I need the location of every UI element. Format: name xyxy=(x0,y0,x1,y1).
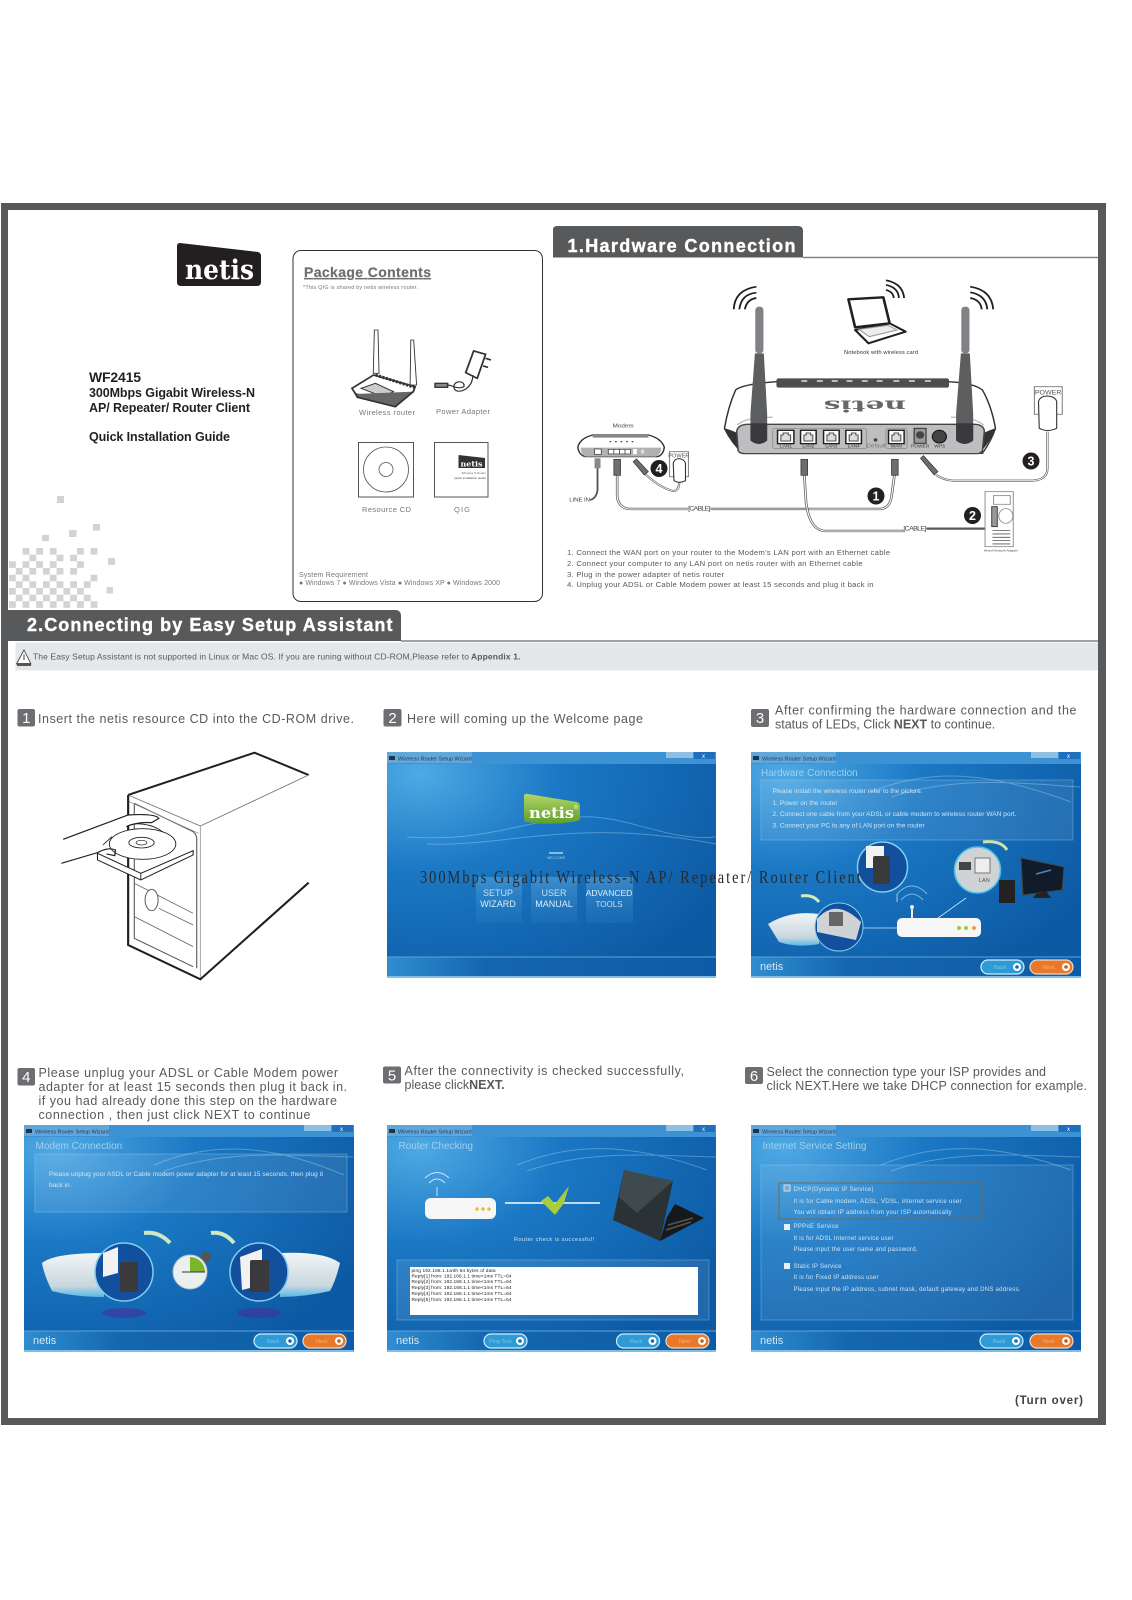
system requirement: ● Windows 7 ● Windows Vista ● Windows XP ● Windows 2000 xyxy=(299,580,500,587)
instruction panel: 2. Connect one cable from your ADSL or cable modem to wireless router WAN port. xyxy=(772,811,1017,818)
service option text: DHCP(Dynamic IP Service) xyxy=(794,1187,874,1193)
instruction panel: 3. Connect your PC to any of LAN port on the router xyxy=(772,822,925,830)
step 4 heading: adapter for at least 15 seconds then plug it back in. xyxy=(38,1080,347,1094)
step 5 heading xyxy=(383,1064,684,1092)
ping panel: Reply[3] from: 192.168.1.1 time<1ms TTL=64 xyxy=(412,1285,512,1291)
screenshot: router checking: x xyxy=(702,1127,705,1133)
circle: LAN port: LAN xyxy=(979,878,990,884)
success message: Router check is successful! xyxy=(514,1237,594,1243)
router back panel: POWER xyxy=(911,444,930,449)
step 3 heading: After confirming the hardware connection and the xyxy=(775,704,1077,718)
service option text xyxy=(794,1187,1021,1293)
welcome label xyxy=(547,853,566,860)
step 4 heading: if you had already done this step on the hardware xyxy=(38,1094,337,1108)
circle: unplugged adapter xyxy=(230,1243,288,1301)
service option text: Please input the user name and password. xyxy=(794,1247,918,1253)
left antenna xyxy=(750,307,767,444)
button: next xyxy=(1030,960,1073,974)
circle: power plug xyxy=(858,842,908,892)
instruction panel xyxy=(35,1154,347,1212)
hardware connection steps: 1. Connect the WAN port on your router to the Modem's LAN port with an Ethernet cable xyxy=(567,548,890,557)
label: wireless router: Wireless router xyxy=(359,408,416,417)
service option text: Please input the IP address, subnet mask, default gateway and DNS address. xyxy=(794,1287,1021,1293)
icon: QIG booklet xyxy=(434,442,488,497)
service option text: It is for ADSL Internet service user xyxy=(794,1236,894,1242)
step badge: 4: 4 xyxy=(656,462,663,476)
step 5 heading: 5 xyxy=(388,1068,396,1084)
heading: package contents: Package Contents xyxy=(304,264,431,280)
illustration: inserting CD into computer xyxy=(61,753,309,979)
screenshot: router checking xyxy=(387,1125,716,1352)
modem and port circle xyxy=(768,896,863,951)
button: setup wizard xyxy=(476,877,522,923)
label: power adapter: Power Adapter xyxy=(436,407,490,416)
step 6 heading: Select the connection type your ISP provides and xyxy=(766,1065,1046,1079)
step 1 heading: 1 xyxy=(22,710,30,727)
modem: Modem xyxy=(613,424,634,429)
screenshot: modem connection xyxy=(24,1125,354,1352)
system requirement xyxy=(299,572,500,587)
power outlet: modem xyxy=(668,452,689,482)
button: user manual: MANUAL xyxy=(535,899,573,909)
button: back xyxy=(980,1334,1023,1348)
panel: package contents xyxy=(293,250,542,602)
cable 3: router power xyxy=(936,432,1047,481)
notice text: Appendix 1. xyxy=(471,652,520,662)
router back panel: WAN xyxy=(891,444,902,449)
router back panel: LAN3 xyxy=(825,444,838,449)
step 4 heading xyxy=(18,1066,347,1122)
button: next: Next xyxy=(1043,965,1055,971)
ping panel: Reply[5] from: 192.168.1.1 time<1ms TTL=64 xyxy=(412,1297,512,1303)
section header: 1.Hardware Connection xyxy=(553,226,1098,258)
button: user manual: USER xyxy=(541,888,567,898)
button: user manual xyxy=(531,877,577,923)
service option text: It is for Fixed IP address user xyxy=(794,1275,878,1281)
screenshot: modem connection: x xyxy=(340,1127,343,1133)
turn over note: (Turn over) xyxy=(1015,1395,1083,1407)
button: ping test: Ping Test xyxy=(489,1339,512,1345)
instruction panel: Please install the wireless router refer to the picture. xyxy=(772,788,923,795)
router xyxy=(724,378,995,454)
button: next: Next xyxy=(1043,1339,1055,1345)
cable connectors xyxy=(614,456,938,475)
cable labels: [CABLE] xyxy=(688,506,711,513)
button: next xyxy=(666,1334,709,1348)
hardware connection steps: 2. Connect your computer to any LAN port on netis router with an Ethernet cable xyxy=(567,559,862,568)
service option text: Static IP Service xyxy=(794,1264,842,1270)
timer xyxy=(173,1250,212,1289)
label: resource CD: Resource CD xyxy=(362,505,412,514)
step badge: 4 xyxy=(650,460,668,477)
step badge: 1 xyxy=(868,488,884,504)
service checkboxes xyxy=(784,1185,790,1269)
step 4 heading: connection , then just click NEXT to continue xyxy=(38,1108,311,1122)
button: next: Next xyxy=(316,1339,328,1345)
screenshot: hardware connection xyxy=(751,752,1081,978)
note: shared QIG: *This QIG is shared by netis wireless router. xyxy=(303,285,418,291)
step 3 heading: status of LEDs, Click NEXT to continue. xyxy=(775,718,995,732)
line-in cable: LINE IN xyxy=(569,498,590,503)
button: setup wizard: SETUP xyxy=(483,888,513,898)
LED bar xyxy=(776,378,949,388)
wizard title: Hardware Connection xyxy=(761,768,858,779)
hardware connection steps: 3. Plug in the power adapter of netis router xyxy=(567,570,724,579)
label: QIG: QIG xyxy=(454,505,470,514)
netis green logo xyxy=(524,794,580,824)
right antenna xyxy=(956,307,973,444)
button: back: Back xyxy=(993,1339,1005,1345)
instruction panel xyxy=(761,780,1073,840)
service option text: PPPoE Service xyxy=(794,1224,839,1230)
screenshot: internet service setting: Wireless Router Setup Wizard xyxy=(762,1130,836,1136)
product title: WF2415 xyxy=(89,369,141,385)
instruction panel: Please unplug your ASDL or Cable modem power adapter for at least 15 seconds, then plug it xyxy=(49,1171,323,1178)
step 1 heading: Insert the netis resource CD into the CD-ROM drive. xyxy=(38,712,354,726)
netis green logo: netis xyxy=(529,804,574,822)
cable 1: modem to router WAN xyxy=(617,475,894,509)
notice text: The Easy Setup Assistant is not supported in Linux or Mac OS. If you are runing without CD-ROM,Please refer to xyxy=(33,652,469,662)
wizard title: Router Checking xyxy=(398,1141,473,1152)
decorative pixel pattern xyxy=(9,496,115,608)
step badge: 3: 3 xyxy=(1028,454,1035,468)
step 6 heading xyxy=(745,1065,1087,1093)
service option text: You will obtain IP address from your ISP automatically xyxy=(794,1210,952,1216)
step 4 heading: 4 xyxy=(22,1069,30,1086)
overlay caption across screenshots: 300Mbps Gigabit Wireless-N AP/ Repeater/ Router Client xyxy=(420,866,861,887)
step 5 heading: please clickNEXT. xyxy=(404,1078,505,1092)
step 2 heading: Here will coming up the Welcome page xyxy=(407,712,643,726)
icon: QIG booklet: netis xyxy=(460,460,483,468)
router back panel: LAN2 xyxy=(802,444,815,449)
icon: resource CD xyxy=(358,442,414,497)
product title: AP/ Repeater/ Router Client xyxy=(89,401,251,415)
netis logo xyxy=(177,243,261,286)
options panel xyxy=(761,1165,1073,1320)
screenshot: welcome page: x xyxy=(702,754,705,760)
button: advanced tools xyxy=(586,877,633,923)
hardware connection diagram xyxy=(569,280,1062,552)
circle: LAN port xyxy=(954,847,1000,893)
notice bar xyxy=(16,642,1098,670)
router back panel: Default xyxy=(867,444,886,450)
router icon xyxy=(425,1172,496,1219)
circle: plugged adapter xyxy=(95,1243,153,1301)
button: ping test xyxy=(484,1334,527,1348)
cable 4: modem power xyxy=(643,472,679,491)
icon: power adapter xyxy=(435,351,491,391)
line-in cable xyxy=(569,458,600,503)
ping panel: Reply[4] from: 192.168.1.1 time<1ms TTL=64 xyxy=(412,1291,512,1297)
ping panel: ping 192.168.1.1with 64 bytes of data xyxy=(412,1268,496,1274)
icon: QIG booklet: Wireless N Router xyxy=(462,471,486,475)
button: back xyxy=(254,1334,297,1348)
footer brand: netis xyxy=(396,1335,420,1347)
screenshot: modem connection: Wireless Router Setup Wizard xyxy=(35,1130,109,1136)
footer brand: netis xyxy=(760,1335,784,1347)
wizard title: Internet Service Setting xyxy=(762,1141,866,1152)
product title: 300Mbps Gigabit Wireless-N xyxy=(89,386,255,400)
router brand, upside down: netis xyxy=(824,397,906,415)
computer tower xyxy=(984,492,1018,552)
page frame xyxy=(1,203,1106,1425)
ping panel xyxy=(397,1260,709,1320)
power outlet: modem: POWER xyxy=(668,454,689,459)
router back panel: LAN4 xyxy=(848,444,860,449)
screenshot: internet service setting: x xyxy=(1067,1127,1070,1133)
power outlet: router xyxy=(1034,387,1062,430)
button: setup wizard: WIZARD xyxy=(480,899,516,909)
button: back: Back xyxy=(994,965,1006,971)
screenshot: welcome page xyxy=(387,752,716,978)
cable 2: router LAN to computer xyxy=(804,475,992,531)
cable labels xyxy=(688,505,927,533)
computer tower: Wired Network Adapter xyxy=(984,548,1018,552)
step 2 heading: 2 xyxy=(388,710,397,727)
ping panel: Reply[1] from: 192.168.1.1 time<1ms TTL=64 xyxy=(412,1274,512,1280)
computer and monitor xyxy=(983,842,1064,903)
notebook label: Notebook with wireless card xyxy=(844,350,918,356)
welcome label: WELCOME xyxy=(547,856,566,860)
icon: QIG booklet: Quick Installation Guide xyxy=(454,476,486,480)
step badge: 1: 1 xyxy=(873,490,880,504)
step 3 heading: 3 xyxy=(756,710,764,727)
button: next: Next xyxy=(679,1339,691,1345)
step 6 heading: 6 xyxy=(750,1068,758,1085)
screenshot: router checking: Wireless Router Setup Wizard xyxy=(398,1130,472,1136)
section header: 2.Connecting by Easy Setup Assistant: 2.Connecting by Easy Setup Assistant xyxy=(27,615,392,635)
icon: notebook xyxy=(848,297,906,343)
arrows xyxy=(144,1233,234,1243)
step 3 heading xyxy=(751,704,1077,732)
hardware connection steps xyxy=(567,548,890,589)
product title xyxy=(89,369,255,444)
shadows under circles xyxy=(102,1308,281,1318)
netis logo: netis xyxy=(185,255,254,286)
icon: wireless router xyxy=(352,330,417,407)
netis green logo: ® xyxy=(574,804,578,811)
right modem xyxy=(280,1253,340,1297)
step badge: 3 xyxy=(1022,452,1040,470)
wireless signal arcs xyxy=(734,280,993,309)
section header: 2.Connecting by Easy Setup Assistant xyxy=(8,610,1098,641)
router back panel xyxy=(737,424,984,454)
router back panel: LAN1 xyxy=(780,444,793,449)
screenshot: welcome page: Wireless Router Setup Wizard xyxy=(398,756,472,762)
wizard title: Modem Connection xyxy=(36,1141,122,1152)
success check and streak xyxy=(505,1186,600,1215)
product title: Quick Installation Guide xyxy=(89,430,230,444)
button: advanced tools: ADVANCED xyxy=(586,888,632,898)
screenshot: internet service setting xyxy=(751,1125,1081,1352)
button: back xyxy=(981,960,1024,974)
left modem xyxy=(42,1253,104,1297)
step badge: 2 xyxy=(964,507,981,524)
power outlet: router: POWER xyxy=(1035,390,1062,397)
button: back xyxy=(616,1334,660,1348)
router with antenna xyxy=(863,886,981,937)
footer brand: netis xyxy=(33,1335,57,1347)
step 4 heading: Please unplug your ADSL or Cable Modem power xyxy=(38,1066,338,1080)
laptop xyxy=(613,1170,704,1241)
step badge: 2: 2 xyxy=(969,509,976,523)
ping panel: Reply[2] from: 192.168.1.1 time<1ms TTL=64 xyxy=(412,1279,512,1285)
button: back: Back xyxy=(267,1339,279,1345)
button: next xyxy=(1030,1334,1073,1348)
service option text: It is for Cable modem, ADSL, VDSL, internet service user xyxy=(794,1199,962,1205)
button: advanced tools: TOOLS xyxy=(596,900,622,909)
icon: warning triangle xyxy=(16,650,31,666)
highlighted DHCP option xyxy=(779,1183,982,1219)
system requirement: System Requirement xyxy=(299,572,368,579)
modem xyxy=(578,424,664,457)
hardware connection steps: 4. Unplug your ADSL or Cable Modem power at least 15 seconds and plug it back in xyxy=(567,580,874,589)
button: next xyxy=(303,1334,346,1348)
router back panel: WPS xyxy=(934,444,945,449)
button: back: Back xyxy=(630,1339,642,1345)
section header: 1.Hardware Connection: 1.Hardware Connection xyxy=(568,236,796,256)
step 5 heading: After the connectivity is checked successfully, xyxy=(404,1064,684,1078)
screenshot: hardware connection: x xyxy=(1067,754,1070,760)
screenshot: hardware connection: Wireless Router Setup Wizard xyxy=(762,756,836,762)
footer brand: netis xyxy=(760,961,784,973)
step 6 heading: click NEXT.Here we take DHCP connection for example. xyxy=(766,1079,1087,1093)
instruction panel: back in. xyxy=(49,1182,72,1189)
cable labels: [CABLE] xyxy=(903,526,927,533)
instruction panel: 1. Power on the router xyxy=(772,800,838,807)
